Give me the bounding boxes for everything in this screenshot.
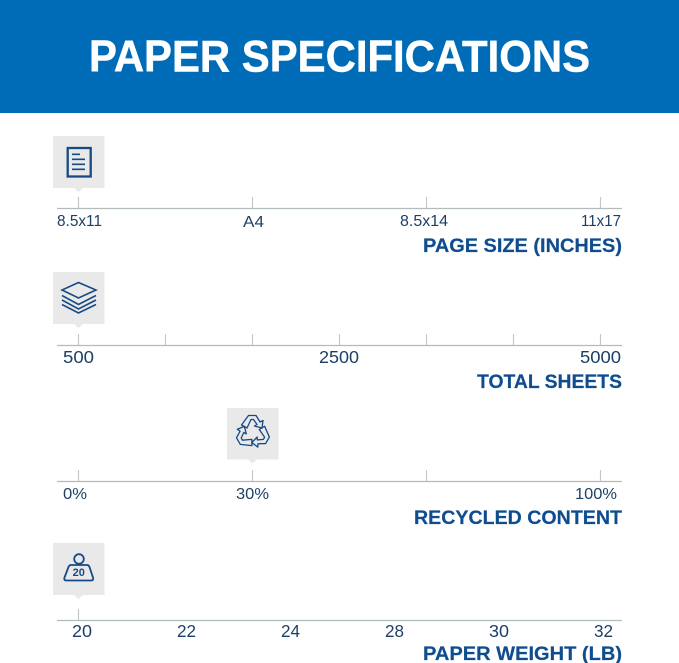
page size tick labels: 11x17 bbox=[581, 213, 621, 230]
icon: paper stack marker bbox=[53, 272, 104, 328]
page size heading: PAGE SIZE (INCHES) bbox=[423, 235, 622, 257]
paper weight tick labels: 20 bbox=[72, 621, 92, 641]
panel: page size scale bbox=[53, 136, 622, 257]
page size tick labels: A4 bbox=[243, 214, 264, 231]
page size axis bbox=[57, 208, 622, 210]
recycled content tick labels: 30% bbox=[236, 486, 269, 503]
icon: document marker bbox=[53, 136, 104, 192]
paper weight tick labels bbox=[72, 621, 613, 641]
total sheets axis bbox=[57, 344, 622, 346]
paper weight tick labels: 24 bbox=[281, 621, 300, 641]
recycled content tick labels: 0% bbox=[63, 486, 87, 503]
paper weight tick labels: 22 bbox=[177, 621, 196, 641]
panel: paper weight scale bbox=[53, 543, 622, 663]
page size tick labels bbox=[57, 213, 621, 231]
paper weight tick labels: 30 bbox=[489, 621, 509, 641]
total sheets tick labels bbox=[63, 347, 621, 367]
page size tick labels: 8.5x11 bbox=[57, 213, 102, 230]
paper weight axis bbox=[57, 620, 622, 622]
paper weight tick labels: 32 bbox=[594, 621, 613, 641]
total sheets heading: TOTAL SHEETS bbox=[477, 371, 622, 393]
page size tick labels: 8.5x14 bbox=[400, 213, 448, 230]
header banner bbox=[0, 0, 679, 113]
recycled content axis bbox=[57, 480, 622, 482]
recycled content heading: RECYCLED CONTENT bbox=[414, 507, 622, 529]
panel: recycled content scale bbox=[57, 408, 622, 529]
total sheets tick labels: 500 bbox=[63, 347, 94, 367]
recycled content tick labels bbox=[63, 486, 617, 503]
recycled content tick labels: 100% bbox=[575, 486, 617, 503]
paper weight tick labels: 28 bbox=[385, 621, 404, 641]
icon: recycling marker bbox=[227, 408, 278, 464]
title: PAPER SPECIFICATIONS bbox=[89, 33, 590, 82]
icon: weight marker bbox=[53, 543, 104, 599]
total sheets tick labels: 2500 bbox=[319, 347, 359, 367]
total sheets tick labels: 5000 bbox=[580, 347, 621, 367]
panel: total sheets scale bbox=[53, 272, 622, 393]
icon: weight marker: 20 bbox=[73, 567, 85, 579]
